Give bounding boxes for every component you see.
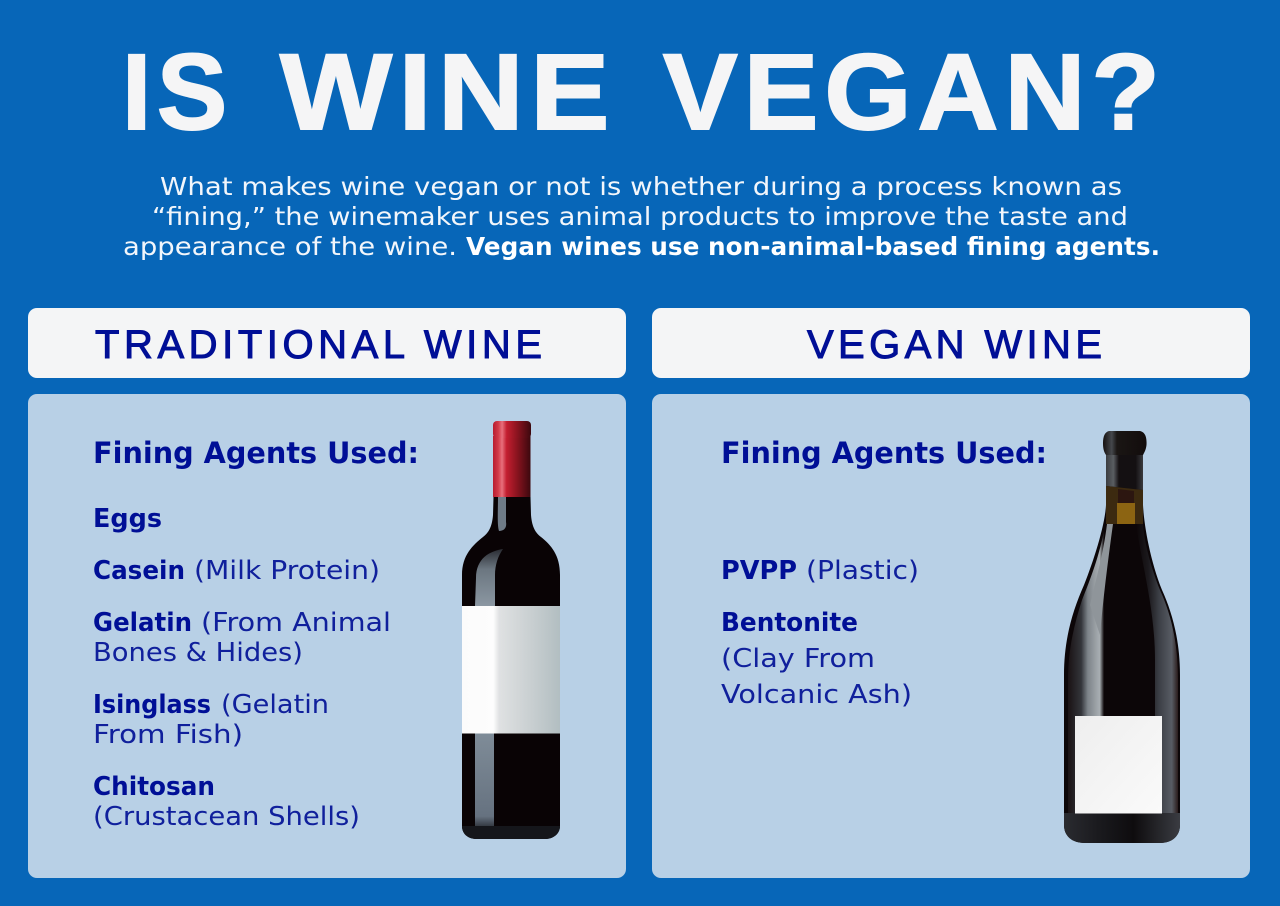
heading: fining agents used: Fining Agents Used: bbox=[721, 436, 1047, 470]
intro text bbox=[123, 172, 1160, 261]
header: traditional wine bbox=[28, 308, 626, 378]
panel: vegan wine bbox=[652, 394, 1250, 878]
title: VEGAN? bbox=[663, 31, 1166, 152]
list of animal fining agents: From Fish) bbox=[93, 720, 243, 750]
list of vegan fining agents: PVPP bbox=[721, 556, 797, 586]
list of animal fining agents: (Gelatin bbox=[221, 690, 329, 720]
header: vegan wine bbox=[652, 308, 1250, 378]
intro text: appearance of the wine. bbox=[123, 232, 457, 261]
header: vegan wine: VEGAN WINE bbox=[807, 323, 1102, 367]
list of vegan fining agents: Volcanic Ash) bbox=[721, 680, 912, 710]
list of vegan fining agents: (Plastic) bbox=[806, 556, 919, 586]
list of animal fining agents: Eggs bbox=[93, 504, 162, 534]
list of vegan fining agents bbox=[721, 556, 919, 710]
intro text: “fining,” the winemaker uses animal products to improve the taste and bbox=[152, 202, 1128, 231]
title: IS bbox=[122, 31, 233, 152]
list of animal fining agents: (From Animal bbox=[201, 608, 391, 638]
title: WINE bbox=[280, 31, 616, 152]
list of vegan fining agents: Bentonite bbox=[721, 608, 858, 638]
list of animal fining agents: (Crustacean Shells) bbox=[93, 802, 360, 832]
list of animal fining agents: Isinglass bbox=[93, 690, 211, 720]
icon: dark wine bottle bbox=[1064, 431, 1180, 843]
list of animal fining agents: Chitosan bbox=[93, 772, 215, 802]
intro text: Vegan wines use non-animal-based fining agents. bbox=[466, 232, 1160, 261]
list of animal fining agents: Casein bbox=[93, 556, 185, 586]
list of vegan fining agents: (Clay From bbox=[721, 644, 875, 674]
list of animal fining agents bbox=[93, 504, 391, 832]
list of animal fining agents: Bones & Hides) bbox=[93, 638, 303, 668]
panel: traditional wine bbox=[28, 394, 626, 878]
icon: red-capped wine bottle bbox=[462, 421, 560, 839]
list of animal fining agents: Gelatin bbox=[93, 608, 192, 638]
list of animal fining agents: (Milk Protein) bbox=[194, 556, 380, 586]
heading: fining agents used: Fining Agents Used: bbox=[93, 436, 419, 470]
title bbox=[122, 31, 1166, 152]
header: traditional wine: TRADITIONAL WINE bbox=[95, 323, 542, 367]
intro text: What makes wine vegan or not is whether during a process known as bbox=[160, 172, 1122, 201]
